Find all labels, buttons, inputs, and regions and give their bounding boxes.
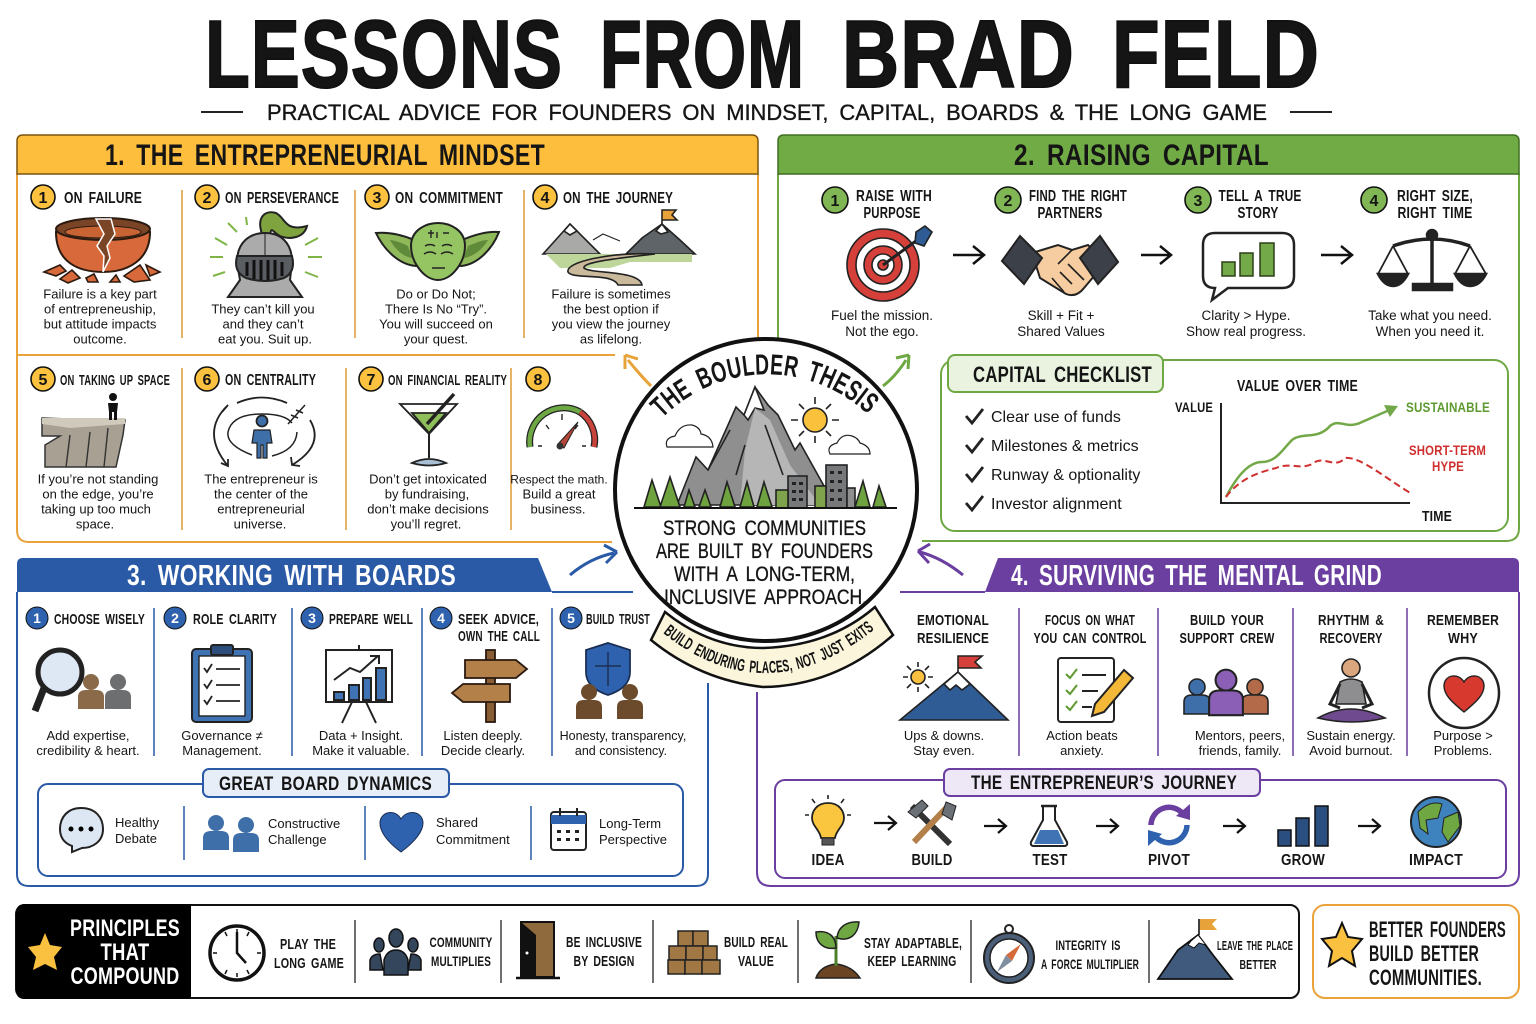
- item: on commitment: [365, 185, 503, 346]
- badge statement: STRONG COMMUNITIES: [663, 517, 866, 540]
- step: tell a true story: TELL A TRUE: [1218, 188, 1302, 205]
- chart: value over time: SHORT-TERM: [1409, 442, 1486, 458]
- item: focus on what you can control: [1034, 612, 1146, 758]
- journey tag: [944, 769, 1260, 796]
- step: impact: IMPACT: [1409, 852, 1463, 869]
- item: on financial reality: you’ll regret.: [391, 516, 461, 532]
- icon: mountain and sun: [900, 656, 1008, 720]
- heading: section 2: [778, 135, 1519, 174]
- item: build your support crew: friends, family.: [1199, 743, 1281, 758]
- item: on failure: Failure is a key part: [43, 286, 157, 302]
- step: impact: [1409, 797, 1463, 869]
- chart: value over time: HYPE: [1432, 458, 1464, 474]
- item: on the journey: Failure is sometimes: [551, 286, 671, 302]
- step: test: TEST: [1032, 852, 1068, 869]
- step: build: [908, 800, 956, 869]
- checklist items: Runway & optionality: [991, 467, 1140, 484]
- item: choose wisely: Add expertise,: [46, 728, 130, 743]
- item: on perseverance: 2: [203, 190, 212, 207]
- step: right size right time: RIGHT TIME: [1398, 205, 1473, 222]
- item: prepare well: Data + Insight.: [319, 728, 403, 743]
- item: role clarity: [164, 607, 277, 758]
- item: on failure: but attitude impacts: [44, 316, 157, 332]
- item: focus on what you can control: YOU CAN CONTROL: [1034, 630, 1146, 647]
- step: raise with purpose: RAISE WITH: [856, 188, 932, 205]
- icon: scales: [1378, 230, 1486, 290]
- item: role clarity: 2: [171, 610, 179, 626]
- item: on failure: [31, 185, 160, 346]
- chart: value over time: SUSTAINABLE: [1406, 399, 1490, 415]
- principle: integrity compass: A FORCE MULTIPLIER: [1041, 956, 1139, 972]
- journey tag: THE ENTREPRENEUR’S JOURNEY: [971, 773, 1237, 794]
- badge statement: WITH A LONG-TERM,: [674, 563, 855, 586]
- heading: section 2: 2. RAISING CAPITAL: [1014, 139, 1269, 172]
- icon: knight helmet: [210, 212, 322, 297]
- item: on commitment: You will succeed on: [379, 316, 493, 332]
- item: build your support crew: SUPPORT CREW: [1180, 630, 1275, 647]
- panel: raising capital: [778, 135, 1519, 541]
- heading: section 1: 1. THE ENTREPRENEURIAL MINDSET: [105, 139, 545, 172]
- item: build your support crew: Mentors, peers,: [1195, 728, 1285, 743]
- arrow: [1141, 246, 1171, 264]
- arrow: [1321, 246, 1352, 264]
- step: tell a true story: Show real progress.: [1186, 324, 1306, 339]
- great board dynamics panel: [38, 769, 683, 876]
- step: tell a true story: [1185, 187, 1306, 339]
- item: on the journey: [533, 185, 695, 346]
- principle: community multiplies: MULTIPLIES: [431, 953, 491, 969]
- item: respect the math: Respect the math.: [510, 472, 608, 486]
- item: on perseverance: eat you. Suit up.: [218, 332, 312, 346]
- icon: presentation board: [326, 645, 392, 723]
- step: build: BUILD: [912, 852, 952, 869]
- icon: signpost: [452, 650, 527, 722]
- step: find the right partners: PARTNERS: [1038, 205, 1103, 222]
- icon: martini glass: [400, 394, 457, 466]
- item: on financial reality: 7: [367, 372, 376, 389]
- item: seek advice: SEEK ADVICE,: [458, 611, 539, 628]
- item: emotional resilience: EMOTIONAL: [917, 612, 989, 629]
- principles label: COMPOUND: [70, 963, 180, 990]
- step: raise with purpose: Fuel the mission.: [831, 308, 933, 323]
- item: prepare well: 3: [308, 610, 316, 626]
- item: on taking up space: If you’re not standing: [38, 472, 158, 486]
- item: on commitment: There Is No “Try”.: [385, 302, 487, 316]
- step: find the right partners: FIND THE RIGHT: [1029, 188, 1127, 205]
- principles label: THAT: [100, 939, 150, 966]
- step: right size right time: RIGHT SIZE,: [1397, 188, 1473, 205]
- item: on the journey: as lifelong.: [580, 332, 642, 346]
- heading: section 4: 4. SURVIVING THE MENTAL GRIND: [1011, 560, 1382, 592]
- step: tell a true story: 3: [1194, 193, 1203, 210]
- icon: shield and people: [576, 643, 643, 719]
- banner ribbon: BUILD ENDURING PLACES, NOT JUST EXITS: [664, 621, 874, 674]
- item: seek advice: 4: [437, 610, 445, 626]
- icon: meditating person: [1318, 659, 1385, 722]
- step: right size right time: [1361, 187, 1492, 339]
- center badge: the boulder thesis: [613, 337, 919, 688]
- icon: sun: [791, 397, 839, 443]
- step: find the right partners: Skill + Fit +: [1028, 308, 1094, 323]
- item: on perseverance: They can’t kill you: [211, 302, 315, 316]
- heading: section 3: 3. WORKING WITH BOARDS: [127, 560, 456, 592]
- item: respect the math: business.: [531, 502, 585, 516]
- item: on financial reality: by fundraising,: [385, 486, 469, 502]
- chart: value over time: [1175, 378, 1490, 525]
- panel: surviving the mental grind: [757, 558, 1519, 886]
- item: build trust: Honesty, transparency,: [560, 729, 686, 743]
- checklist items: [966, 409, 1140, 513]
- item: on taking up space: taking up too much: [41, 502, 151, 516]
- arrow: [1096, 819, 1118, 833]
- principle: stay adaptable: [816, 922, 962, 978]
- step: idea: IDEA: [812, 852, 845, 869]
- dynamic: long-term perspective: Long-Term: [599, 816, 661, 831]
- step: find the right partners: 2: [1004, 193, 1013, 210]
- checklist items: Investor alignment: [991, 496, 1122, 513]
- item: on financial reality: Don’t get intoxicated: [369, 472, 487, 486]
- arrow: [874, 816, 896, 830]
- item: on the journey: the best option if: [563, 302, 659, 316]
- principle: community multiplies: COMMUNITY: [430, 934, 493, 950]
- principles strip: [16, 904, 1299, 999]
- item: remember why: Purpose >: [1433, 728, 1493, 743]
- icon: clipboard: [192, 645, 252, 722]
- title: LESSONS: [205, 1, 563, 108]
- item: on taking up space: space.: [76, 516, 114, 532]
- step: test: [1031, 806, 1068, 869]
- dynamic: shared commitment: Shared: [436, 815, 478, 830]
- item: emotional resilience: Stay even.: [913, 743, 975, 758]
- step: pivot: PIVOT: [1148, 852, 1190, 869]
- item: build trust: BUILD TRUST: [586, 611, 650, 628]
- item: on centrality: 6: [203, 372, 212, 389]
- callout: better founders: [1313, 905, 1519, 998]
- item: prepare well: [301, 607, 413, 758]
- item: on centrality: ON CENTRALITY: [225, 372, 316, 389]
- item: on taking up space: [31, 367, 170, 532]
- item: seek advice: Decide clearly.: [441, 743, 525, 758]
- dynamic: long-term perspective: Perspective: [599, 832, 667, 847]
- step: raise with purpose: Not the ego.: [845, 324, 919, 339]
- step: grow: [1278, 806, 1328, 869]
- item: focus on what you can control: Action beats: [1046, 728, 1118, 743]
- capital checklist panel: [941, 355, 1508, 531]
- item: role clarity: ROLE CLARITY: [193, 611, 277, 628]
- item: focus on what you can control: anxiety.: [1060, 743, 1104, 758]
- item: on failure: of entrepreneuship,: [44, 302, 156, 316]
- item: seek advice: [430, 607, 540, 758]
- checklist items: Milestones & metrics: [991, 438, 1139, 455]
- step: tell a true story: STORY: [1238, 205, 1279, 222]
- icon: cliff edge: [42, 393, 125, 467]
- icon: person in orbits: [214, 398, 315, 466]
- item: respect the math: 8: [534, 372, 543, 389]
- item: on centrality: the center of the: [214, 486, 308, 502]
- step: raise with purpose: 1: [831, 193, 840, 210]
- step: find the right partners: [995, 187, 1127, 339]
- arrow: center to capital: [883, 355, 909, 386]
- item: on failure: ON FAILURE: [64, 190, 142, 207]
- principle: community multiplies: [370, 929, 493, 975]
- step: right size right time: Take what you need.: [1368, 308, 1492, 323]
- principle: integrity compass: INTEGRITY IS: [1056, 937, 1120, 953]
- title: FROM: [600, 1, 805, 108]
- icon: chart bubble: [1203, 233, 1294, 300]
- step: raise with purpose: [822, 187, 933, 339]
- item: rhythm and recovery: Sustain energy.: [1306, 728, 1396, 743]
- item: on the journey: ON THE JOURNEY: [563, 190, 673, 207]
- icon: heart in circle: [1429, 658, 1499, 728]
- item: on centrality: [195, 367, 318, 532]
- item: on centrality: universe.: [234, 516, 286, 532]
- dynamic: healthy debate: Healthy: [115, 815, 160, 830]
- principle: long game: PLAY THE: [280, 936, 336, 953]
- step: pivot: [1148, 804, 1190, 869]
- chart: value over time: VALUE: [1175, 399, 1213, 415]
- item: on taking up space: 5: [39, 372, 48, 389]
- principles label: PRINCIPLES: [70, 915, 180, 942]
- badge heading: THE BOULDER THESIS: [648, 354, 878, 416]
- principle: build real value: BUILD REAL: [724, 934, 788, 951]
- principle: leave the place better: [1158, 919, 1293, 979]
- item: build your support crew: [1180, 612, 1285, 758]
- principle: long game: LONG GAME: [274, 955, 344, 972]
- item: choose wisely: CHOOSE WISELY: [54, 611, 145, 628]
- item: build trust: [560, 607, 686, 758]
- item: on centrality: entrepreneurial: [217, 502, 305, 516]
- item: emotional resilience: RESILIENCE: [917, 630, 989, 647]
- arrow: center to boards: [570, 545, 617, 575]
- item: on commitment: 3: [373, 190, 382, 207]
- item: build trust: and consistency.: [575, 744, 667, 758]
- dynamic: shared commitment: Commitment: [436, 832, 510, 847]
- item: on perseverance: ON PERSEVERANCE: [225, 190, 339, 207]
- icon: three people: [1184, 670, 1268, 715]
- dynamics tag: [203, 769, 449, 797]
- item: role clarity: Management.: [182, 743, 262, 758]
- dynamic: long-term perspective: [551, 808, 667, 850]
- item: choose wisely: 1: [33, 610, 41, 626]
- item: seek advice: Listen deeply.: [443, 728, 523, 743]
- item: build trust: 5: [567, 610, 575, 626]
- badge statement: ARE BUILT BY FOUNDERS: [656, 540, 873, 563]
- dynamics tag: GREAT BOARD DYNAMICS: [219, 774, 432, 795]
- heading: section 1: [17, 135, 758, 174]
- item: on perseverance: [195, 185, 339, 346]
- item: remember why: [1427, 612, 1499, 758]
- title: FELD: [1112, 1, 1320, 108]
- checklist tag: CAPITAL CHECKLIST: [973, 362, 1152, 387]
- icon: gauge: [530, 408, 595, 450]
- item: rhythm and recovery: Avoid burnout.: [1309, 743, 1393, 758]
- step: raise with purpose: PURPOSE: [864, 205, 921, 222]
- dynamic: healthy debate: [60, 808, 160, 852]
- subtitle: PRACTICAL ADVICE FOR FOUNDERS ON MINDSET, CAPITAL, BOARDS & THE LONG GAME: [267, 100, 1267, 125]
- principle: integrity compass: [984, 925, 1139, 983]
- icon: broken pot: [44, 218, 160, 283]
- dynamic: shared commitment: [380, 812, 510, 852]
- principle: inclusive by design: BY DESIGN: [574, 953, 634, 970]
- panel: working with boards: [17, 558, 708, 886]
- step: right size right time: 4: [1370, 193, 1379, 210]
- item: on commitment: Do or Do Not;: [396, 286, 476, 302]
- arrow: center to mental grind: [918, 544, 963, 575]
- item: prepare well: PREPARE WELL: [329, 611, 413, 628]
- item: rhythm and recovery: RHYTHM &: [1318, 612, 1384, 629]
- item: on taking up space: on the edge, you’re: [42, 486, 154, 502]
- item: on commitment: your quest.: [404, 332, 468, 346]
- item: prepare well: Make it valuable.: [312, 743, 410, 758]
- principle: leave the place better: BETTER: [1240, 957, 1277, 972]
- item: on financial reality: [359, 367, 507, 532]
- item: on financial reality: ON FINANCIAL REALITY: [388, 372, 507, 389]
- dynamic: constructive challenge: [203, 815, 340, 852]
- callout: better founders: COMMUNITIES.: [1369, 965, 1482, 990]
- title: [205, 1, 1320, 108]
- icon: handshake: [1002, 236, 1118, 295]
- principle: inclusive by design: BE INCLUSIVE: [566, 934, 642, 951]
- step: right size right time: When you need it.: [1376, 324, 1484, 339]
- item: remember why: Problems.: [1434, 743, 1492, 758]
- step: idea: [805, 795, 851, 869]
- badge statement: INCLUSIVE APPROACH.: [664, 586, 867, 609]
- principle: stay adaptable: KEEP LEARNING: [868, 953, 956, 970]
- icon: mountain path: [543, 210, 695, 285]
- item: rhythm and recovery: RECOVERY: [1320, 630, 1382, 647]
- icon: checklist and pencil: [1058, 658, 1133, 722]
- arrow: [953, 246, 984, 264]
- panel: the entrepreneurial mindset: [17, 135, 758, 542]
- principle: stay adaptable: STAY ADAPTABLE,: [864, 935, 962, 952]
- principle: inclusive by design: [516, 922, 642, 978]
- step: grow: GROW: [1281, 852, 1326, 869]
- checklist tag: [948, 355, 1163, 392]
- item: on commitment: ON COMMITMENT: [395, 190, 503, 207]
- principles label: [16, 904, 191, 999]
- item: on failure: 1: [39, 190, 48, 207]
- principle: long game: [210, 926, 344, 980]
- principle: build real value: [668, 931, 788, 974]
- item: choose wisely: [26, 607, 145, 758]
- item: respect the math: [510, 367, 608, 516]
- item: remember why: WHY: [1448, 630, 1478, 647]
- item: focus on what you can control: FOCUS ON WHAT: [1045, 612, 1135, 629]
- banner ribbon: [650, 605, 895, 688]
- arrow: [1223, 819, 1245, 833]
- item: on the journey: 4: [541, 190, 550, 207]
- arrow: center to mindset: [625, 355, 651, 386]
- item: on failure: outcome.: [73, 332, 127, 346]
- checklist items: Clear use of funds: [991, 409, 1121, 426]
- chart: value over time: VALUE OVER TIME: [1237, 378, 1358, 395]
- dynamic: constructive challenge: Constructive: [268, 816, 340, 831]
- principle: build real value: VALUE: [738, 953, 774, 970]
- chart: value over time: TIME: [1422, 508, 1452, 525]
- principle: leave the place better: LEAVE THE PLACE: [1217, 938, 1293, 953]
- item: respect the math: Build a great: [522, 486, 596, 502]
- icon: clouds: [666, 425, 870, 454]
- item: seek advice: OWN THE CALL: [458, 628, 540, 645]
- item: rhythm and recovery: [1306, 612, 1396, 758]
- icon: target: [847, 226, 932, 301]
- item: on centrality: The entrepreneur is: [204, 472, 318, 486]
- item: on perseverance: and they can’t: [223, 316, 304, 332]
- item: role clarity: Governance ≠: [181, 728, 263, 743]
- step: find the right partners: Shared Values: [1017, 324, 1105, 339]
- icon: magnifier and people: [35, 650, 131, 711]
- step: tell a true story: Clarity > Hype.: [1202, 308, 1290, 323]
- entrepreneur's journey panel: [775, 769, 1506, 878]
- dynamic: constructive challenge: Challenge: [268, 832, 327, 847]
- item: choose wisely: credibility & heart.: [36, 743, 140, 758]
- item: build your support crew: BUILD YOUR: [1190, 612, 1264, 629]
- callout: better founders: BUILD BETTER: [1369, 941, 1479, 966]
- item: emotional resilience: [900, 612, 1008, 758]
- item: emotional resilience: Ups & downs.: [904, 728, 984, 743]
- item: on taking up space: ON TAKING UP SPACE: [60, 372, 170, 389]
- arrow: [1358, 819, 1380, 833]
- dynamic: healthy debate: Debate: [115, 831, 157, 846]
- title: BRAD: [842, 1, 1075, 108]
- icon: yoda: [376, 223, 499, 280]
- arrow: [984, 819, 1006, 833]
- item: on the journey: you view the journey: [552, 316, 671, 332]
- badge statement: [656, 517, 873, 609]
- item: remember why: REMEMBER: [1427, 612, 1499, 629]
- item: on financial reality: don’t make decisions: [367, 502, 489, 516]
- illustration: mountain and city: [634, 387, 897, 508]
